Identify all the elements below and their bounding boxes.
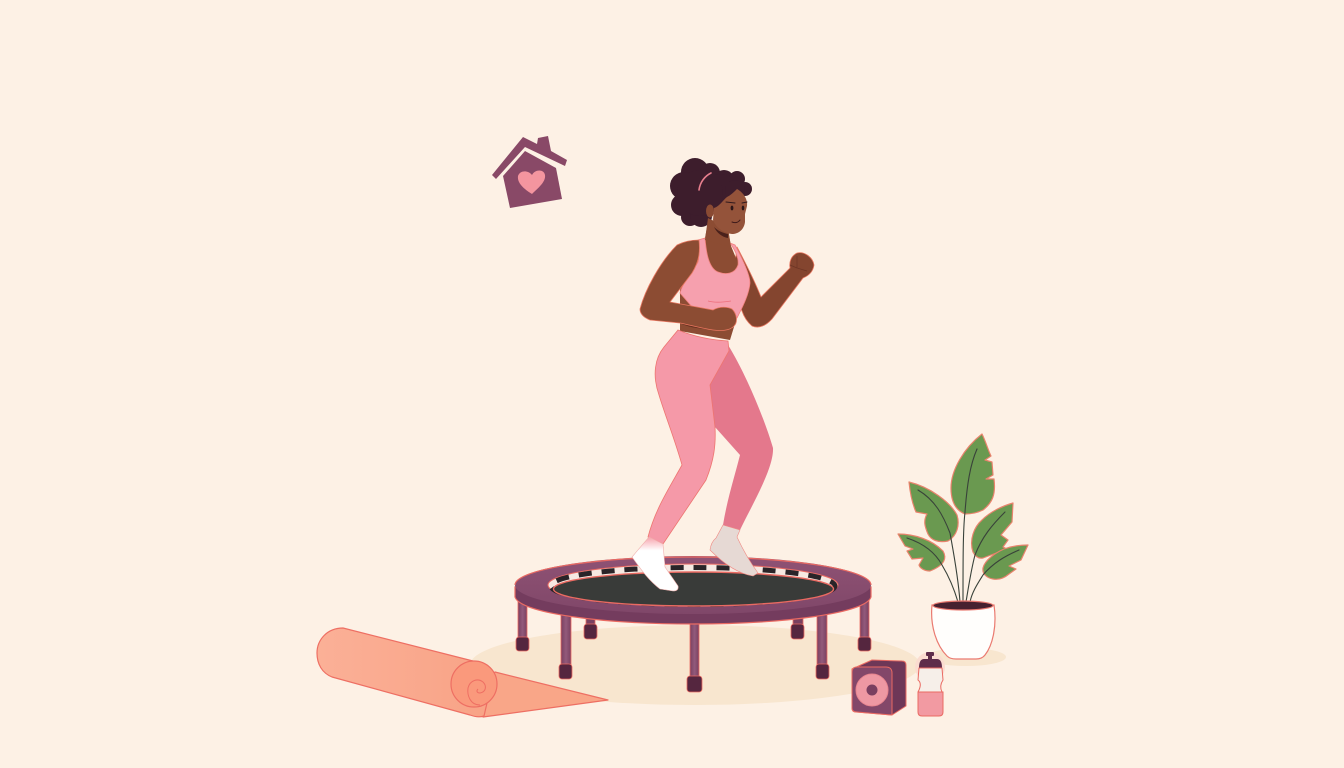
hair — [670, 158, 752, 227]
woman jumping — [632, 158, 814, 591]
ear — [706, 204, 714, 218]
torso skin — [680, 222, 745, 340]
leaves — [898, 434, 1028, 579]
back sock — [710, 525, 758, 576]
mat roll end — [451, 661, 497, 707]
facial features — [726, 202, 747, 223]
trampoline frame — [515, 556, 871, 624]
head — [670, 158, 752, 247]
trampoline front legs — [516, 600, 871, 692]
stems and veins — [907, 449, 1019, 602]
pot — [932, 601, 995, 659]
water bottle — [915, 652, 945, 716]
tank top — [680, 238, 750, 318]
midriff crease — [682, 323, 732, 328]
yoga mat — [317, 628, 608, 717]
house with heart icon — [492, 136, 567, 208]
fist detail — [790, 256, 807, 271]
face — [713, 189, 747, 234]
floor shadow — [470, 625, 1006, 705]
jumping mat — [554, 572, 834, 606]
top seam — [708, 301, 731, 302]
neck — [705, 218, 731, 247]
trampoline back legs — [584, 615, 804, 639]
front arm — [640, 240, 736, 331]
plant — [898, 434, 1028, 659]
neck shadow — [714, 227, 728, 238]
springs — [548, 564, 838, 606]
speaker — [852, 660, 906, 715]
front sock — [632, 537, 678, 591]
front leg — [648, 330, 729, 544]
back arm — [732, 247, 814, 327]
headband — [699, 173, 711, 190]
back leg — [708, 345, 773, 530]
